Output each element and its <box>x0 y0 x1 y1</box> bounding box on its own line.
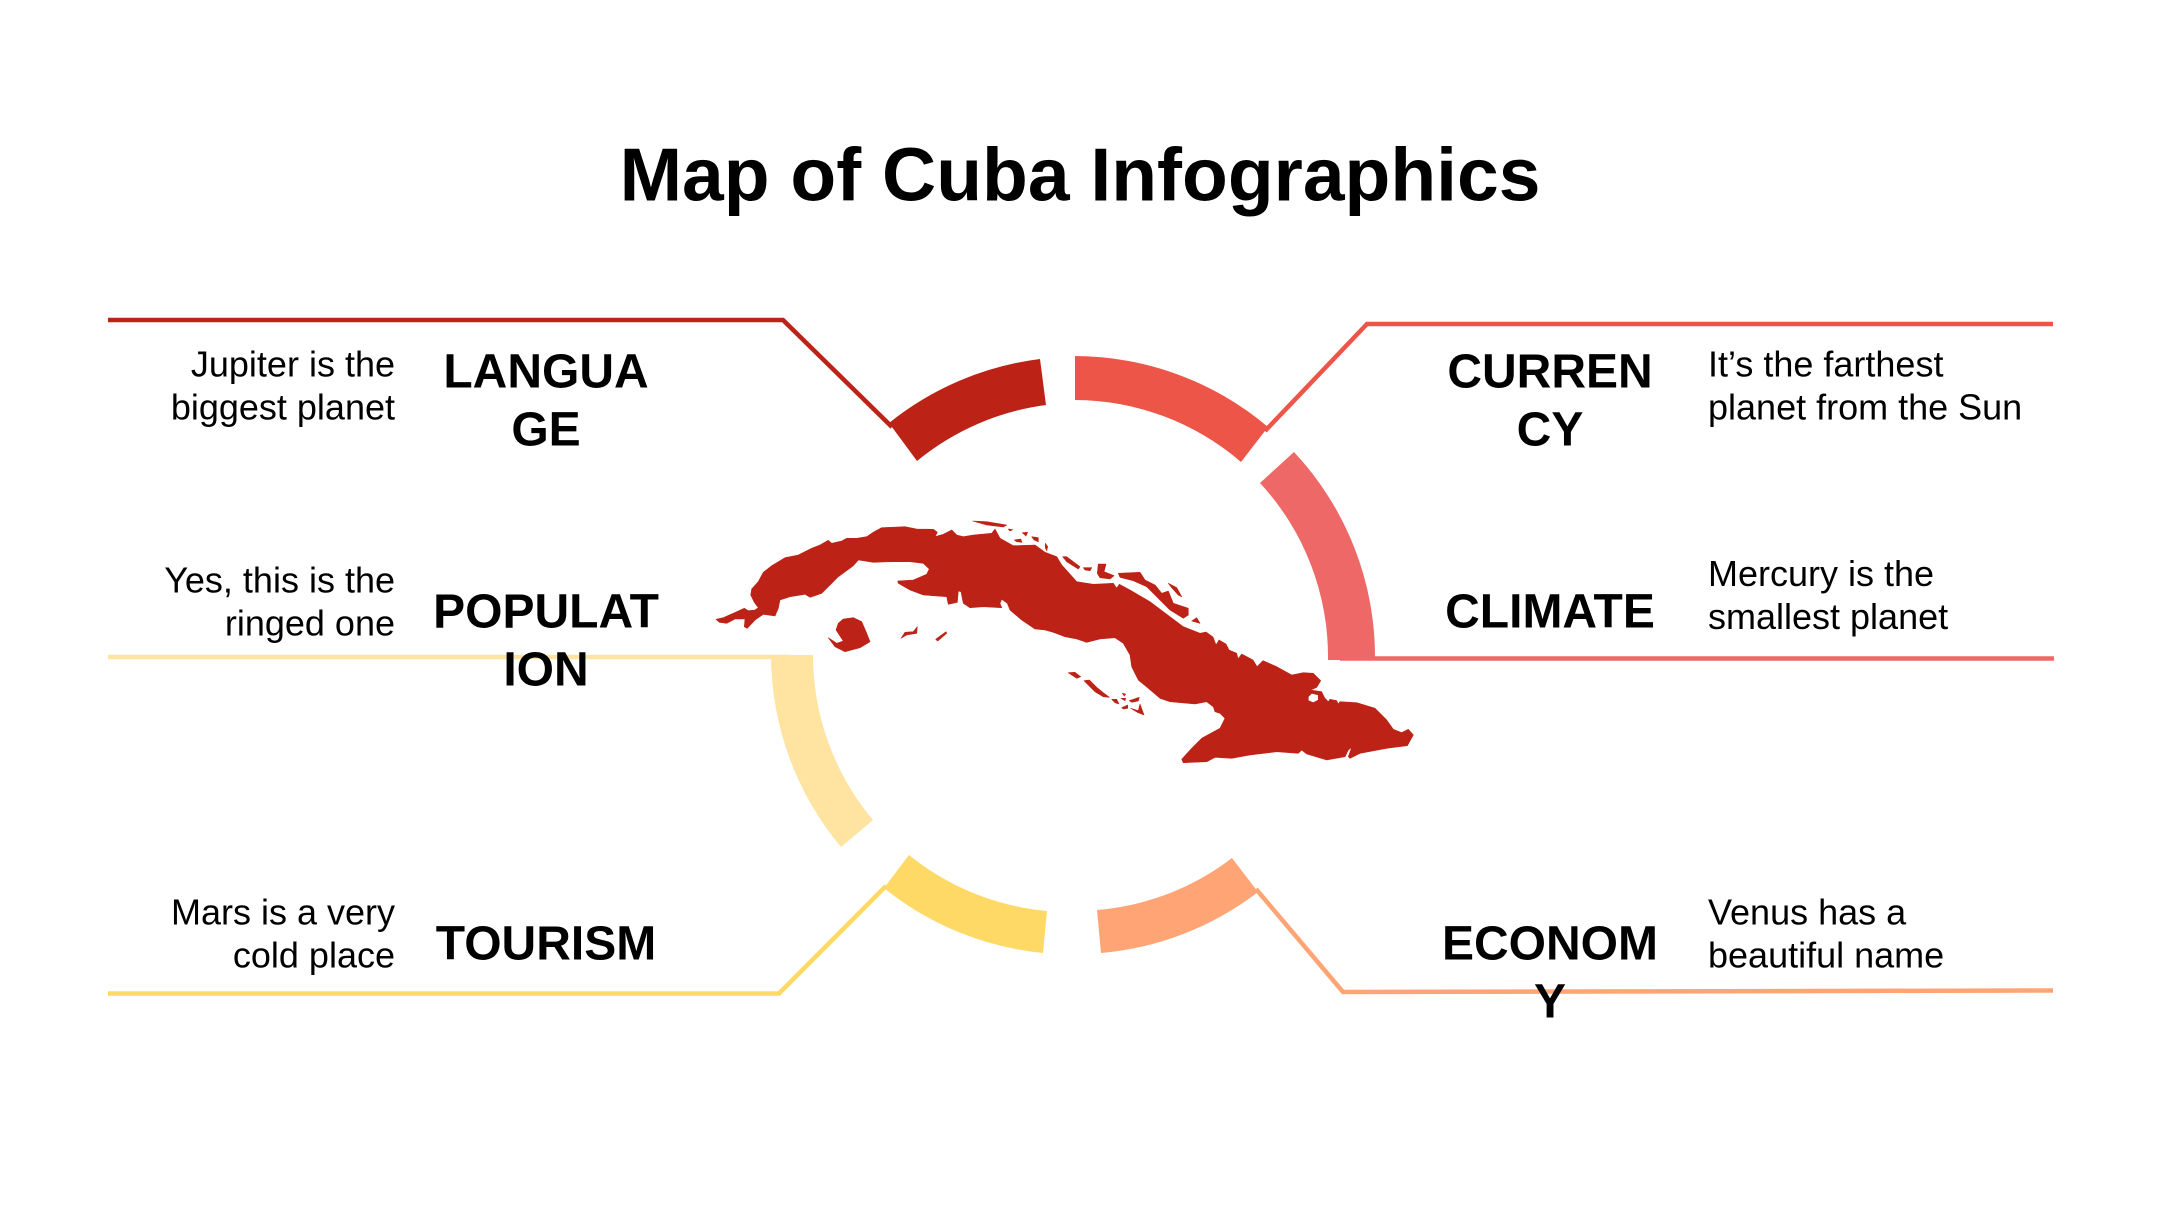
text block: economy: ECONOM <box>1442 918 1658 970</box>
panel: economy connector and arc <box>1097 858 2053 992</box>
text block: currency: It’s the farthest <box>1708 344 1943 384</box>
text block: population: ION <box>503 644 589 696</box>
panel: population connector and arc <box>108 655 873 847</box>
text block: tourism: Mars is a very <box>171 892 395 932</box>
text block: language: LANGUA <box>443 346 649 398</box>
text block: population: ringed one <box>225 602 395 644</box>
text block: economy: beautiful name <box>1708 934 1944 976</box>
text block: economy: Venus has a <box>1708 892 1907 932</box>
text block: tourism <box>171 892 656 976</box>
text block: currency: planet from the Sun <box>1708 386 2022 428</box>
panel: currency connector and arc <box>1075 324 2053 462</box>
panel: climate connector and arc <box>1260 452 2054 660</box>
text block: language: Jupiter is the <box>191 344 395 384</box>
text block: climate <box>1445 553 1948 638</box>
map of Cuba <box>716 521 1413 763</box>
text block: currency <box>1447 344 2022 456</box>
text block: climate: Mercury is the <box>1708 553 1934 594</box>
text block: currency: CY <box>1517 404 1583 456</box>
text block: language: biggest planet <box>171 386 395 428</box>
text block: tourism: TOURISM <box>436 918 656 970</box>
panel: tourism connector and arc <box>108 855 1047 994</box>
text block: language <box>171 344 649 456</box>
text block: population: POPULAT <box>433 586 659 638</box>
panel: language connector and arc <box>108 320 1046 461</box>
text block: currency: CURREN <box>1447 346 1653 398</box>
text block: climate: CLIMATE <box>1445 586 1655 638</box>
text block: economy <box>1442 892 1944 1028</box>
text block: population <box>164 560 659 696</box>
text block: economy: Y <box>1534 976 1566 1028</box>
text block: population: Yes, this is the <box>164 560 395 600</box>
text block: tourism: cold place <box>233 934 395 976</box>
text block: language: GE <box>511 404 581 456</box>
title: Map of Cuba Infographics <box>620 132 1540 216</box>
text block: climate: smallest planet <box>1708 596 1948 637</box>
